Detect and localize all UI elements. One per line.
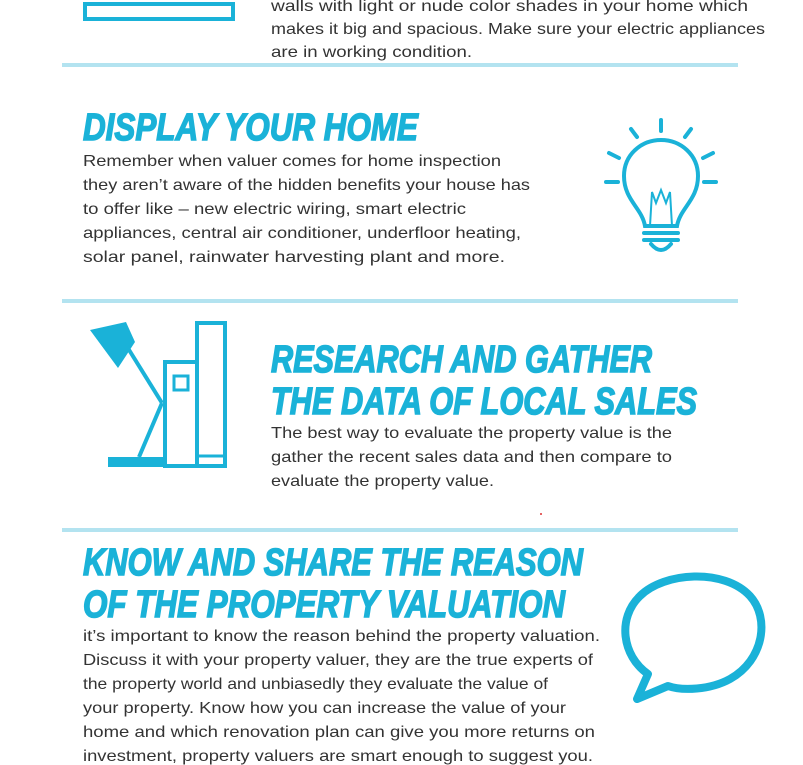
text block: know and share: Discuss it with your property valuer, they are the true experts of <box>83 652 594 669</box>
heading: know and share: OF THE PROPERTY VALUATION <box>83 584 566 626</box>
text block: display your home <box>83 153 530 266</box>
text block: display your home: Remember when valuer comes for home inspection <box>83 153 501 170</box>
heading: know and share: KNOW AND SHARE THE REASON <box>83 542 584 584</box>
text block: display your home: appliances, central air conditioner, underfloor heating, <box>83 225 521 242</box>
text block: top paragraph <box>270 0 765 61</box>
text block: top paragraph: are in working condition. <box>271 44 472 61</box>
text block: research <box>271 425 672 490</box>
icon: light bulb <box>606 120 716 250</box>
text block: display your home: they aren’t aware of the hidden benefits your house has <box>83 177 530 194</box>
text block: know and share <box>83 628 600 765</box>
heading: research and gather: RESEARCH AND GATHER <box>271 339 652 381</box>
heading: research and gather <box>271 339 697 423</box>
heading: know and share <box>83 542 584 626</box>
text block: know and share: home and which renovation plan can give you more returns on <box>83 724 595 741</box>
text block: display your home: to offer like – new electric wiring, smart electric <box>83 201 466 218</box>
text block: research: gather the recent sales data and then compare to <box>271 449 672 466</box>
text block: research: The best way to evaluate the property value is the <box>271 425 672 442</box>
text block: research: evaluate the property value. <box>271 473 494 490</box>
text block: top paragraph: makes it big and spacious. Make sure your electric appliances <box>271 21 765 38</box>
text block: know and share: investment, property valuers are smart enough to suggest you. <box>83 748 593 765</box>
icon: speech bubble <box>625 576 761 699</box>
text block: know and share: your property. Know how you can increase the value of your <box>83 700 567 717</box>
text block: know and share: the property world and unbiasedly they evaluate the value of <box>83 676 549 693</box>
heading: research and gather: THE DATA OF LOCAL SALES <box>271 381 697 423</box>
icon: desk lamp and books <box>90 322 225 467</box>
text block: display your home: solar panel, rainwater harvesting plant and more. <box>83 249 505 266</box>
icon: rectangle outline (top) <box>85 4 233 19</box>
heading: display your home: DISPLAY YOUR HOME <box>83 107 419 149</box>
text block: know and share: it’s important to know the reason behind the property valuation. <box>83 628 600 645</box>
